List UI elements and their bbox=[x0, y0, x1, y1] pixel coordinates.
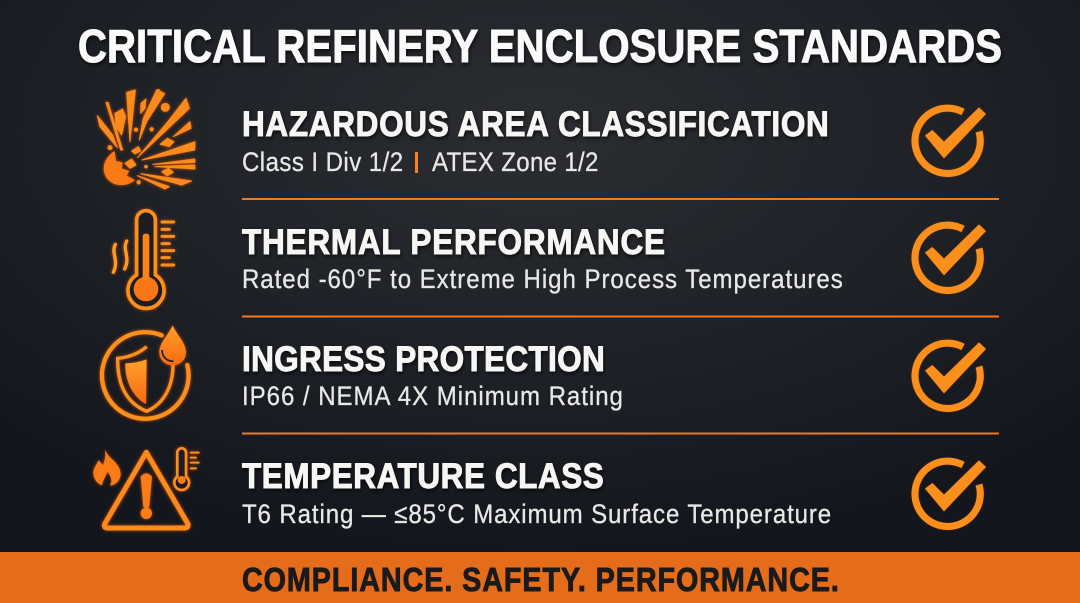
icon: thermometer bbox=[113, 211, 174, 308]
row 3 text: INGRESS PROTECTION bbox=[242, 341, 605, 379]
row 4 text: TEMPERATURE CLASS bbox=[242, 458, 604, 496]
row 1 text: HAZARDOUS AREA CLASSIFICATION bbox=[242, 106, 829, 144]
row 1 text bbox=[242, 106, 829, 177]
row 4 text: T6 Rating — ≤85°C Maximum Surface Temperature bbox=[242, 500, 831, 529]
icon: shield with water drop bbox=[102, 325, 189, 419]
row 1 text: ATEX Zone 1/2 bbox=[432, 148, 598, 177]
icon: check badge 3 bbox=[915, 342, 986, 408]
row 2 text: Rated -60°F to Extreme High Process Temperatures bbox=[242, 265, 843, 294]
footer banner: COMPLIANCE. SAFETY. PERFORMANCE. bbox=[242, 561, 839, 598]
row 4 text bbox=[242, 458, 831, 529]
row 2 text: THERMAL PERFORMANCE bbox=[242, 224, 665, 262]
row 3 text bbox=[242, 341, 623, 411]
icon: explosion bbox=[97, 90, 195, 189]
row 1 text: Class I Div 1/2 bbox=[242, 148, 403, 177]
icon: warning triangle with flame and thermometer bbox=[93, 448, 199, 528]
icon: check badge 1 bbox=[915, 107, 986, 173]
row 3 text: IP66 / NEMA 4X Minimum Rating bbox=[242, 382, 623, 411]
icon: check badge 4 bbox=[915, 460, 986, 526]
icon: check badge 2 bbox=[915, 224, 986, 290]
row 2 text bbox=[242, 224, 843, 294]
title: CRITICAL REFINERY ENCLOSURE STANDARDS bbox=[78, 21, 1002, 73]
footer banner bbox=[0, 552, 1080, 603]
